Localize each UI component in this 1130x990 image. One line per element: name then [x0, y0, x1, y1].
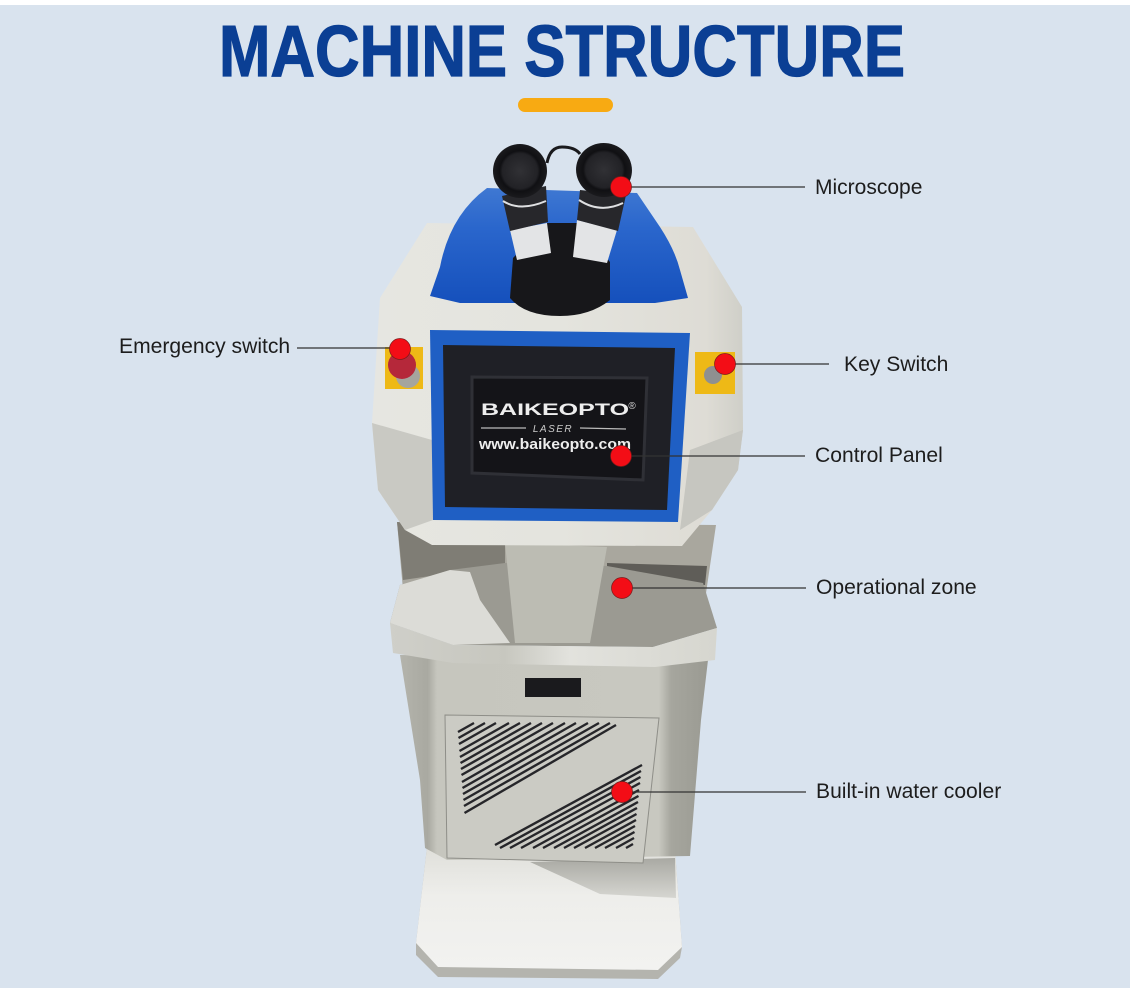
website text: www.baikeopto.com	[478, 437, 631, 453]
callout: emergency switch: Emergency switch	[119, 335, 290, 358]
cooler display	[525, 678, 581, 697]
microscope	[488, 139, 636, 316]
microscope base	[510, 223, 610, 316]
control panel frame	[430, 330, 690, 522]
callout: emergency switch	[119, 335, 410, 360]
left eyecup	[488, 139, 552, 203]
title: MACHINE STRUCTURE	[219, 12, 905, 92]
left eyepiece tube	[510, 223, 551, 260]
lower right facet	[680, 430, 743, 530]
callout: built-in water cooler: Built-in water cooler	[816, 780, 1001, 803]
back wall	[397, 522, 716, 600]
work table top	[390, 563, 717, 647]
eyepiece cable	[547, 147, 580, 163]
laser text: LASER	[533, 424, 573, 435]
laser head housing	[372, 188, 743, 546]
emergency button	[385, 347, 423, 389]
callout: operational zone	[612, 576, 977, 599]
callout: control panel	[610, 444, 943, 467]
callout: key switch: Key Switch	[844, 353, 948, 376]
right eyecup	[572, 139, 636, 201]
control panel screen	[443, 345, 675, 510]
callout: key switch	[714, 353, 948, 376]
registered mark: ®	[628, 401, 636, 412]
right eyepiece tube	[573, 220, 617, 263]
centre column	[505, 543, 607, 643]
callout: microscope: Microscope	[815, 176, 922, 199]
logo divider lines	[481, 428, 626, 429]
left eyepiece rings	[503, 200, 623, 208]
blue top cover	[430, 188, 688, 303]
logo display	[472, 377, 647, 480]
title accent bar	[518, 98, 613, 112]
lower vent slots	[495, 765, 642, 848]
lower left facet	[372, 423, 433, 530]
key switch	[695, 352, 735, 394]
machine illustration	[372, 139, 743, 979]
callout: microscope	[610, 176, 922, 199]
callout: control panel: Control Panel	[815, 444, 943, 467]
work table front edge	[390, 623, 717, 667]
vent panel	[445, 715, 659, 863]
cooler cabinet	[400, 655, 708, 863]
machine base	[416, 847, 682, 979]
upper vent slots	[458, 723, 616, 813]
logo text: BAIKEOPTO	[481, 400, 629, 419]
callout: operational zone: Operational zone	[816, 576, 977, 599]
operational zone	[390, 522, 717, 667]
callout: built-in water cooler	[612, 780, 1001, 803]
